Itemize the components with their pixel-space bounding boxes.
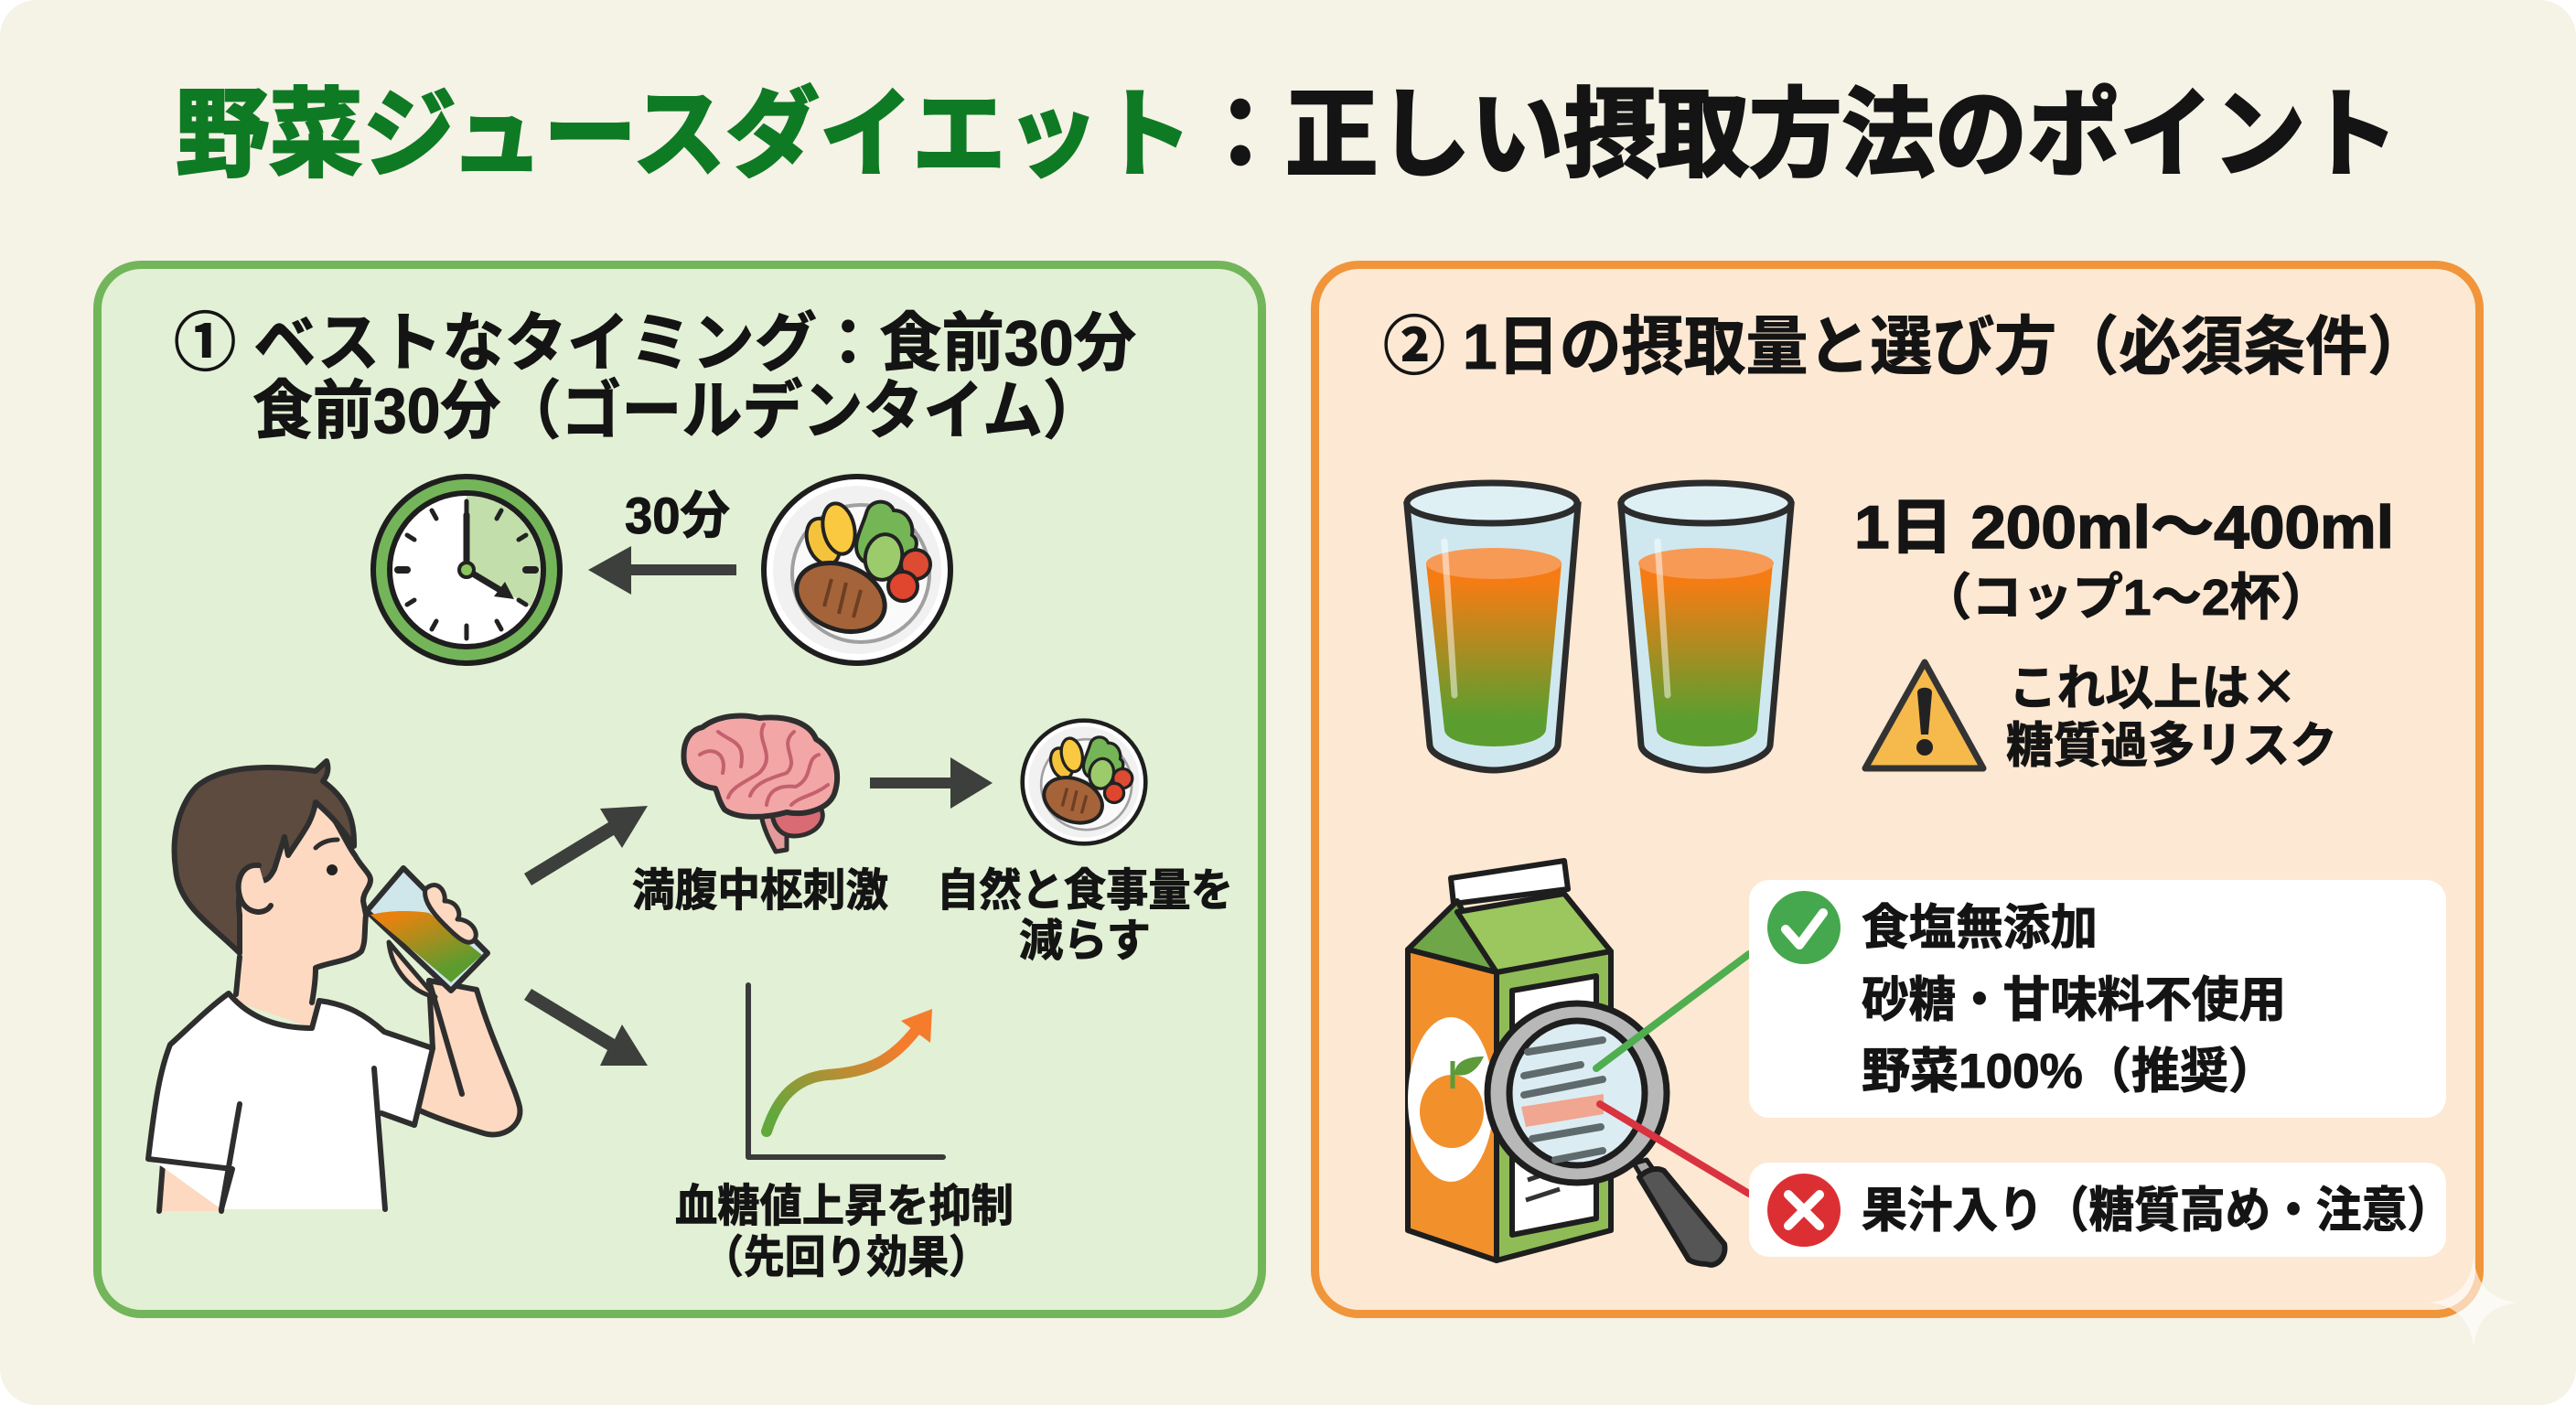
connector: good label — [1596, 954, 1749, 1068]
callout: recommended: 食塩無添加 — [1862, 901, 2098, 955]
callout: recommended: 野菜100%（推奨） — [1862, 1045, 2277, 1099]
text: risk warning — [2006, 649, 2337, 773]
panel: amount and selection — [1315, 265, 2479, 1314]
arrow: to chart — [524, 989, 648, 1066]
icon: glass 2 — [1621, 483, 1791, 770]
ear — [239, 865, 271, 912]
title: 野菜ジュースダイエット — [176, 81, 1193, 189]
chart: blood sugar curve — [748, 985, 943, 1157]
label: suppress blood sugar — [675, 1182, 1014, 1282]
label: reduce food: 減らす — [1019, 917, 1151, 966]
icon: juice carton — [1408, 861, 1611, 1260]
icon: magnifying glass — [1487, 1003, 1724, 1265]
lower left arm — [159, 1164, 229, 1211]
icon: cross — [1767, 1174, 1841, 1247]
heading: best timing: ① ベストなタイミング：食前30分 — [174, 307, 1136, 379]
icon: glass 1 — [1407, 483, 1578, 770]
head — [231, 802, 370, 1003]
arrow: to brain — [524, 806, 648, 885]
raised arm — [412, 981, 520, 1134]
text: daily amount: （コップ1〜2杯） — [1921, 569, 2331, 626]
label: reduce food: 自然と食事量を — [937, 866, 1233, 916]
label: 30 minutes: 30分 — [625, 487, 730, 544]
panel: best timing — [97, 265, 1262, 1314]
title: ： — [1195, 81, 1286, 189]
icon: warning — [1865, 662, 1983, 768]
icon: brain — [683, 715, 837, 852]
heading: amount and selection: ② 1日の摂取量と選び方（必須条件） — [1383, 311, 2430, 382]
text: daily amount: 1日 200ml〜400ml — [1854, 493, 2394, 561]
text: risk warning: これ以上は× — [2009, 649, 2298, 719]
callout: recommended: 砂糖・甘味料不使用 — [1862, 973, 2286, 1027]
icon: clock — [373, 477, 560, 663]
icon: plate — [764, 477, 950, 663]
eye and brow — [327, 864, 338, 875]
label: suppress blood sugar: 血糖値上昇を抑制 — [675, 1182, 1014, 1231]
callout: caution — [1749, 1163, 2453, 1257]
arrow: brain to plate — [870, 757, 993, 809]
callout: caution: 果汁入り（糖質高め・注意） — [1862, 1184, 2453, 1238]
text: risk warning: 糖質過多リスク — [2006, 719, 2337, 773]
hair — [175, 761, 354, 953]
heading: best timing — [174, 307, 1136, 446]
shirt — [148, 993, 385, 1209]
label: reduce food — [937, 866, 1233, 966]
icon: check — [1767, 891, 1841, 964]
illustration: man drinking juice — [148, 761, 520, 1211]
label: suppress blood sugar: （先回り効果） — [703, 1233, 990, 1282]
arrow: plate to clock — [588, 546, 736, 595]
connector: bad label — [1600, 1104, 1749, 1194]
heading: best timing: 食前30分（ゴールデンタイム） — [252, 375, 1103, 446]
icon: small plate — [1023, 721, 1145, 843]
neck — [236, 951, 316, 1029]
callout: recommended — [1749, 880, 2446, 1118]
title — [176, 81, 2399, 189]
decorative sparkle — [2430, 1259, 2517, 1346]
title: 正しい摂取方法のポイント — [1285, 81, 2399, 189]
text: daily amount — [1854, 493, 2394, 626]
hand — [425, 885, 476, 942]
label: satiety centre: 満腹中枢刺激 — [632, 866, 888, 916]
glass — [367, 868, 488, 991]
